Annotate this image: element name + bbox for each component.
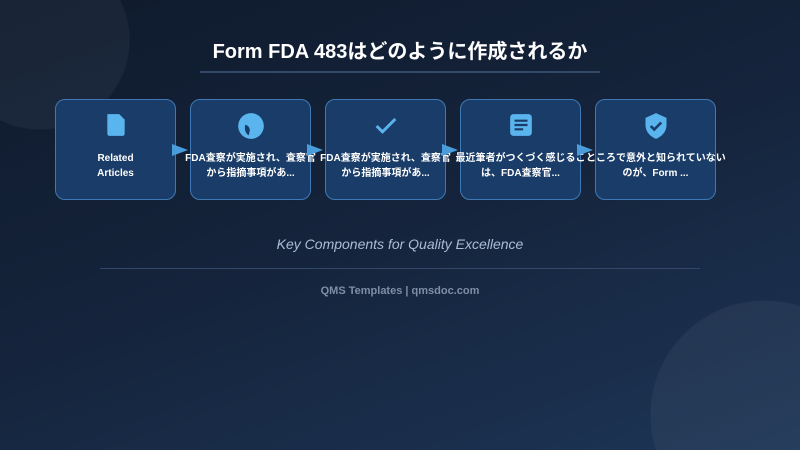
- text: Articles: [97, 168, 134, 179]
- text: から指摘事項があ...: [206, 168, 295, 179]
- card 3: [325, 99, 446, 200]
- subtitle: Key Components for Quality Excellence: [277, 236, 523, 252]
- arrow: [172, 144, 188, 156]
- arrow: [442, 144, 458, 156]
- text: [320, 152, 451, 179]
- text: FDA査察が実施され、査察官: [320, 153, 451, 164]
- icon: shield: [646, 113, 666, 139]
- text: [456, 152, 586, 179]
- text: は、FDA査察官...: [481, 168, 560, 179]
- text: のが、Form ...: [623, 168, 688, 179]
- text: [97, 153, 134, 179]
- text: [586, 152, 726, 179]
- card 5: [595, 99, 716, 200]
- card 1: [55, 99, 176, 200]
- icon: document: [107, 114, 125, 136]
- icon: check: [376, 118, 396, 134]
- icon: list document: [510, 114, 532, 136]
- card 4: [460, 99, 581, 200]
- text: 最近筆者がつくづく感じるこ: [456, 153, 586, 164]
- arrow: [577, 144, 593, 156]
- text: [185, 152, 316, 179]
- text: から指摘事項があ...: [341, 168, 430, 179]
- text: FDA査察が実施され、査察官: [185, 153, 316, 164]
- arrow: [307, 144, 323, 156]
- card 2: [190, 99, 311, 200]
- icon: globe: [238, 113, 264, 139]
- title: Form FDA 483はどのように作成されるか: [213, 41, 587, 63]
- footer: QMS Templates | qmsdoc.com: [321, 285, 479, 297]
- text: Related: [97, 153, 134, 164]
- text: ところで意外と知られていない: [586, 153, 726, 164]
